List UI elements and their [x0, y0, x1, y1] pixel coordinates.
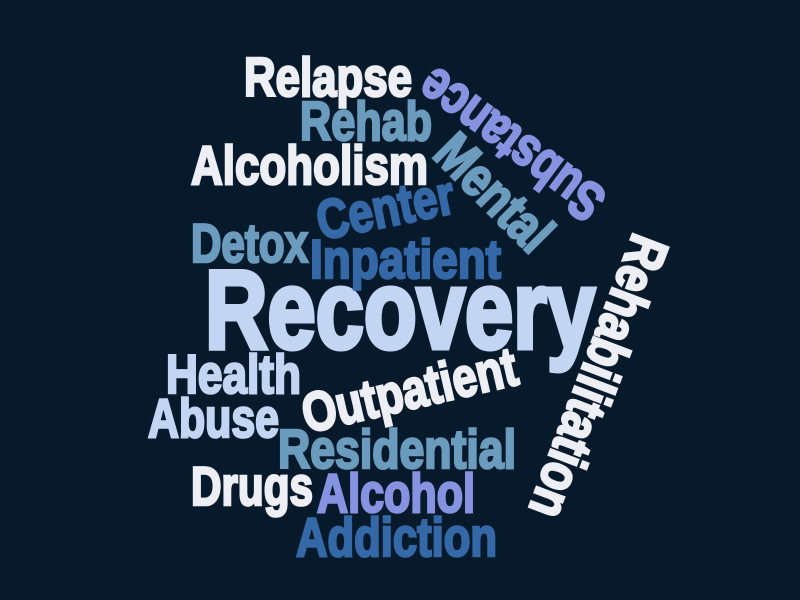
word: Inpatient: Inpatient — [310, 228, 501, 290]
word: Detox: Detox — [191, 212, 308, 274]
word: Outpatient: Outpatient — [296, 335, 523, 445]
word: Relapse: Relapse — [244, 46, 412, 108]
word: Alcohol: Alcohol — [317, 462, 475, 524]
word: Recovery: Recovery — [205, 248, 595, 372]
word: Residential: Residential — [278, 418, 516, 480]
word: Alcoholism: Alcoholism — [191, 134, 428, 196]
word: Drugs: Drugs — [191, 455, 313, 517]
word: Substance: Substance — [406, 56, 616, 234]
word: Rehabilitation: Rehabilitation — [517, 227, 681, 527]
word: Center: Center — [311, 163, 460, 252]
word: Abuse: Abuse — [148, 387, 279, 449]
word: Mental: Mental — [423, 121, 566, 264]
word: Addiction: Addiction — [296, 506, 497, 568]
word: Health: Health — [166, 343, 301, 405]
word: Rehab: Rehab — [300, 90, 432, 152]
